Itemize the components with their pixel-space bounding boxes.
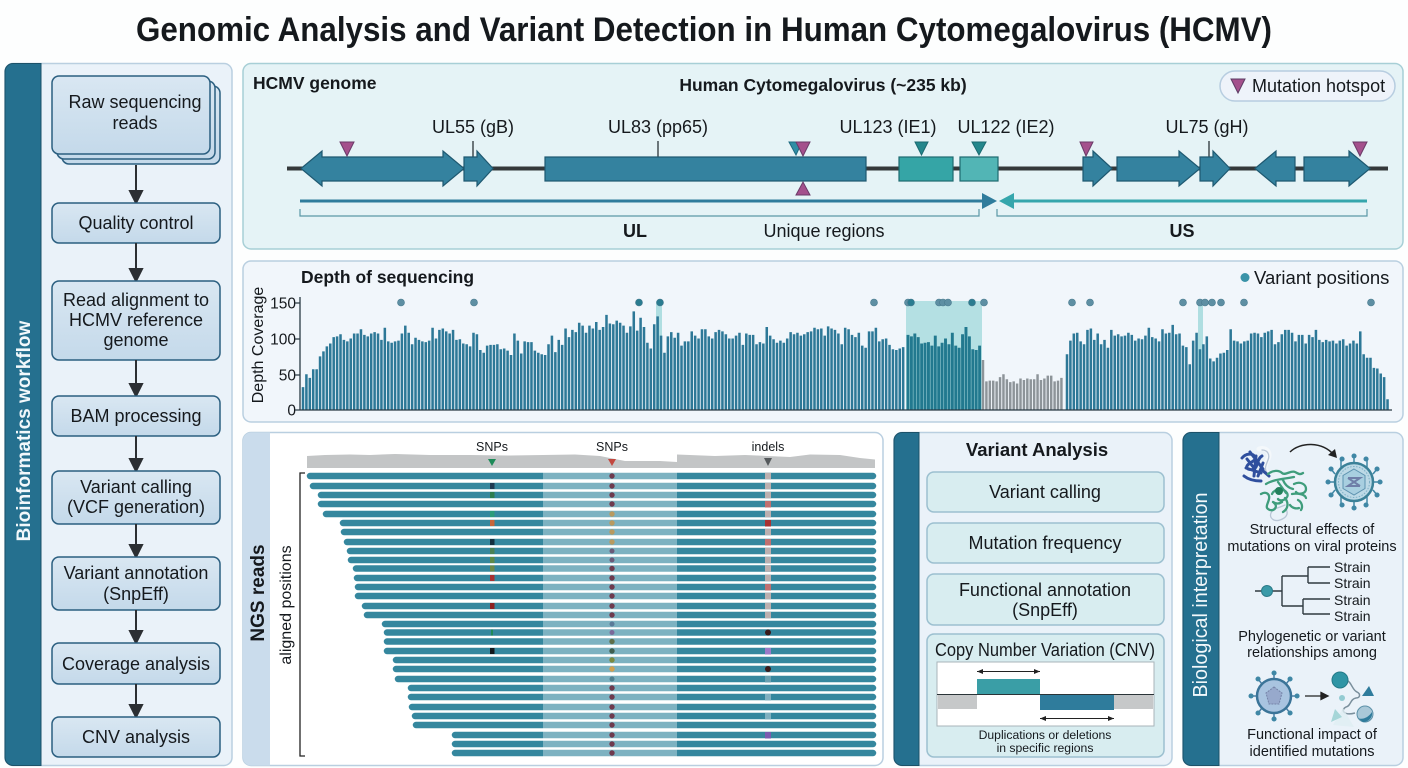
step: quality control: Quality control xyxy=(78,213,194,233)
variant position dots xyxy=(398,299,1374,306)
tree labels: Strain xyxy=(1334,592,1371,608)
variant markers xyxy=(488,458,772,466)
text: phylogenetic relationships: Phylogenetic or variant xyxy=(1238,629,1386,645)
bars: low coverage deletion region xyxy=(983,360,1061,410)
step: raw sequencing reads xyxy=(52,76,220,164)
text: phylogenetic relationships xyxy=(1238,629,1386,661)
step: variant calling xyxy=(52,471,220,524)
region label: US: US xyxy=(1169,221,1195,241)
step: BAM processing xyxy=(52,396,220,436)
heading: genome size: Human Cytomegalovirus (~235 kb) xyxy=(679,75,967,95)
shaded central region xyxy=(543,472,677,757)
axes xyxy=(295,297,1392,410)
legend: mutation hotspot: Mutation hotspot xyxy=(1252,76,1385,96)
genes: UL123 and UL122 xyxy=(899,157,998,181)
item: variant calling: Variant calling xyxy=(989,482,1101,502)
panel: bioinformatics workflow xyxy=(5,64,232,766)
step: variant annotation: Variant annotation xyxy=(64,563,208,583)
heading: variant analysis: Variant Analysis xyxy=(966,439,1108,460)
tree labels xyxy=(1334,559,1371,624)
y axis title: Depth Coverage xyxy=(250,287,267,403)
CNV chart xyxy=(937,662,1154,726)
coverage highlight strips xyxy=(656,301,1203,410)
step: coverage analysis: Coverage analysis xyxy=(62,654,210,674)
gene labels: UL123 (IE1) xyxy=(839,117,937,137)
indel column xyxy=(765,473,771,738)
title: Genomic Analysis and Variant Detection in Human Cytomegalovirus (HCMV) xyxy=(136,11,1272,49)
CNV caption: Duplications or deletions xyxy=(979,728,1111,742)
region label: UL: UL xyxy=(623,221,647,241)
y axis labels: 0 xyxy=(287,402,296,420)
bracket xyxy=(300,473,305,756)
coverage track xyxy=(307,454,875,468)
text: structural effects: mutations on viral proteins xyxy=(1227,539,1397,555)
genome backbone xyxy=(287,166,1388,170)
item: copy number variation xyxy=(927,634,1164,757)
item: functional annotation xyxy=(927,574,1164,625)
arrow: annotation to coverage xyxy=(130,610,142,643)
mutation hotspot markers xyxy=(340,142,1367,195)
arrow: reads to quality control xyxy=(130,165,142,203)
step: read alignment: HCMV reference xyxy=(69,310,203,330)
arrow: quality control to alignment xyxy=(130,243,142,281)
region label: unique regions: Unique regions xyxy=(763,221,885,241)
SNP column 1 xyxy=(490,483,494,654)
gene arrows xyxy=(301,151,1370,186)
variant labels: indels xyxy=(752,440,784,454)
step: coverage analysis xyxy=(52,643,220,684)
panel: NGS reads xyxy=(243,432,883,766)
panel: variant analysis xyxy=(894,432,1172,766)
text: phylogenetic relationships: relationships among xyxy=(1247,645,1377,661)
item: functional annotation: (SnpEff) xyxy=(1012,600,1078,620)
gene labels: UL75 (gH) xyxy=(1165,117,1249,137)
icon: functional impact network xyxy=(1331,672,1374,727)
legend: variant positions: Variant positions xyxy=(1254,267,1389,288)
icon: protein structure xyxy=(1242,449,1306,521)
tree labels: Strain xyxy=(1334,575,1371,591)
icon: phylogenetic tree xyxy=(1255,567,1330,614)
text: structural effects: Structural effects of xyxy=(1250,522,1375,538)
y axis labels: 100 xyxy=(270,332,296,348)
panel: depth of sequencing xyxy=(243,261,1403,422)
text: functional impact xyxy=(1247,727,1378,760)
aligned reads xyxy=(310,476,873,753)
CNV caption xyxy=(979,728,1111,755)
SNP column 2 xyxy=(609,473,615,756)
arrow: coverage to CNV xyxy=(130,684,142,717)
CNV caption: in specific regions xyxy=(997,741,1093,755)
tree labels: Strain xyxy=(1334,559,1371,575)
arrow: variant calling to annotation xyxy=(130,524,142,557)
bars: UL coverage xyxy=(303,311,903,410)
step: CNV analysis: CNV analysis xyxy=(82,727,190,747)
arrow: BAM to variant calling xyxy=(130,436,142,471)
text: functional impact: Functional impact of xyxy=(1247,727,1378,743)
y axis labels: 150 xyxy=(270,296,296,312)
y axis labels xyxy=(270,296,296,420)
axis label: aligned positions: aligned positions xyxy=(278,545,295,665)
step: BAM processing: BAM processing xyxy=(70,406,202,426)
text: functional impact: identified mutations xyxy=(1250,744,1374,760)
step: quality control xyxy=(52,203,220,243)
panel: HCMV genome xyxy=(243,64,1403,249)
variant labels: SNPs xyxy=(596,440,628,454)
variant labels: SNPs xyxy=(476,440,508,454)
step: read alignment: Read alignment to xyxy=(63,290,209,310)
gene labels: UL83 (pp65) xyxy=(608,117,708,137)
arrow: virus to impact xyxy=(1305,692,1328,700)
icon: virus with capsid xyxy=(1328,456,1380,508)
tree labels: Strain xyxy=(1334,608,1371,624)
icon: variant virus xyxy=(1251,673,1297,719)
panel: biological interpretation xyxy=(1183,432,1403,766)
sidebar label: workflow: Bioinformatics workflow xyxy=(14,320,35,541)
text: structural effects xyxy=(1227,522,1397,555)
item: copy number variation: Copy Number Variation (CNV) xyxy=(935,640,1155,660)
step: raw sequencing reads: Raw sequencing xyxy=(68,92,202,112)
gene labels xyxy=(432,117,1249,157)
heading: HCMV genome: HCMV genome xyxy=(253,73,377,93)
item: functional annotation: Functional annotation xyxy=(959,580,1131,600)
step: variant calling: (VCF generation) xyxy=(67,497,205,517)
region brackets xyxy=(300,209,1367,216)
arrowhead xyxy=(1328,449,1337,458)
step: variant calling: Variant calling xyxy=(80,477,192,497)
arrow: alignment to BAM xyxy=(130,360,142,396)
step: raw sequencing reads: reads xyxy=(112,113,158,133)
item: variant calling xyxy=(927,472,1164,512)
variant labels xyxy=(476,440,784,454)
gene labels: UL122 (IE2) xyxy=(957,117,1055,137)
gene labels: UL55 (gB) xyxy=(432,117,514,137)
step: variant annotation xyxy=(52,557,220,610)
item: mutation frequency: Mutation frequency xyxy=(968,533,1122,553)
step: read alignment: genome xyxy=(103,330,169,350)
y axis labels: 50 xyxy=(279,368,296,384)
bars: highlighted region coverage xyxy=(908,327,980,410)
bars: US coverage xyxy=(1067,325,1388,410)
coverage highlight band xyxy=(906,301,982,410)
item: mutation frequency xyxy=(927,523,1164,563)
step: CNV analysis xyxy=(52,717,220,757)
step: read alignment xyxy=(52,281,220,360)
region arrow: UL xyxy=(300,193,997,209)
region arrow: US xyxy=(999,193,1367,209)
step: variant annotation: (SnpEff) xyxy=(103,584,169,604)
arrow: protein to virus xyxy=(1290,444,1334,455)
heading: depth of sequencing: Depth of sequencing xyxy=(301,267,474,287)
legend: mutation hotspot xyxy=(1220,71,1395,101)
sidebar label: NGS reads: NGS reads xyxy=(248,544,269,642)
sidebar label: biological interpretation: Biological interpretation xyxy=(1190,492,1212,698)
